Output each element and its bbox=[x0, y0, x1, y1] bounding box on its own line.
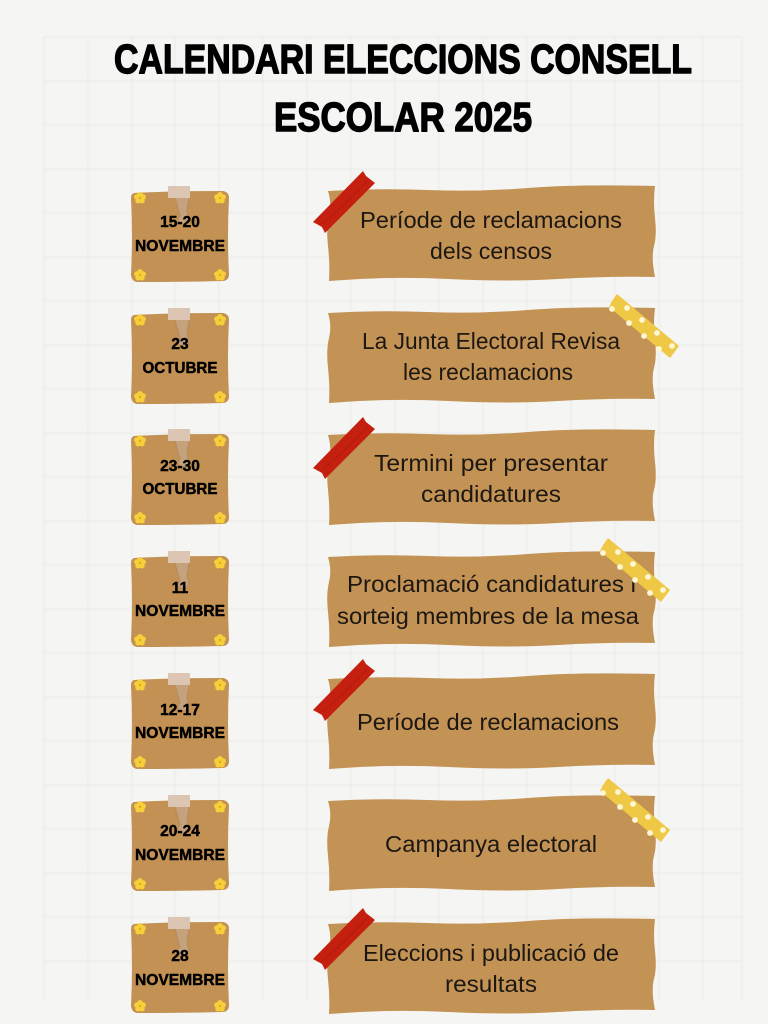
row 2: date label bbox=[142, 336, 218, 377]
row 2: description text: La Junta Electoral Revisa bbox=[362, 328, 621, 354]
title bbox=[114, 36, 692, 140]
row 6: description panel bbox=[327, 795, 656, 891]
row 4: description text bbox=[337, 571, 640, 629]
row 1: date label: NOVEMBRE bbox=[135, 238, 225, 255]
row 6: yellow tape bbox=[600, 778, 670, 842]
row 7: description panel bbox=[327, 918, 656, 1014]
row 3: description text bbox=[374, 450, 608, 507]
row 2: date note bbox=[131, 308, 229, 404]
row 7: date label: NOVEMBRE bbox=[135, 972, 225, 989]
row 7: description text bbox=[363, 940, 619, 997]
row 7: date note bbox=[131, 917, 229, 1013]
row 4: description text: Proclamació candidatures i bbox=[347, 571, 636, 597]
row 7: description text: resultats bbox=[445, 971, 537, 997]
row 6: description text: Campanya electoral bbox=[385, 831, 597, 857]
row 1: description panel bbox=[327, 185, 656, 281]
row 6: date note bbox=[131, 795, 229, 891]
row 1: date label bbox=[135, 214, 225, 255]
row 1: description text: dels censos bbox=[430, 238, 552, 264]
row 2: description panel bbox=[327, 307, 656, 403]
row 1: red tape bbox=[313, 171, 375, 233]
row 4: description text: sorteig membres de la mesa bbox=[337, 603, 640, 629]
row 5: date label: 12-17 bbox=[160, 702, 200, 719]
row 3: description text: candidatures bbox=[421, 481, 561, 507]
row 1: date label: 15-20 bbox=[160, 214, 200, 231]
row 6: date label: 20-24 bbox=[160, 823, 200, 840]
row 7: date label bbox=[135, 948, 225, 989]
row 5: date note bbox=[131, 673, 229, 769]
row 2: description text: les reclamacions bbox=[403, 359, 573, 385]
row 3: date label: OCTUBRE bbox=[142, 481, 218, 498]
row 5: red tape bbox=[313, 659, 375, 721]
row 4: date label: NOVEMBRE bbox=[135, 603, 225, 620]
row 1: date note bbox=[131, 186, 229, 282]
row 5: description panel bbox=[327, 673, 656, 769]
row 4: date note bbox=[131, 551, 229, 647]
row 5: date label bbox=[135, 702, 225, 742]
row 4: date label bbox=[135, 580, 225, 620]
row 2: date label: 23 bbox=[171, 336, 189, 353]
row 4: date label: 11 bbox=[172, 580, 189, 597]
row 3: description text: Termini per presentar bbox=[374, 450, 608, 476]
row 4: description panel bbox=[327, 551, 656, 647]
row 3: description panel bbox=[327, 429, 656, 525]
row 4: yellow tape bbox=[600, 538, 670, 602]
row 3: date label bbox=[142, 458, 218, 498]
row 3: date note bbox=[131, 429, 229, 525]
row 2: yellow tape bbox=[609, 294, 679, 358]
row 3: red tape bbox=[313, 417, 375, 479]
row 2: date label: OCTUBRE bbox=[142, 360, 218, 377]
title: ESCOLAR 2025 bbox=[274, 94, 532, 140]
row 7: description text: Eleccions i publicació de bbox=[363, 940, 619, 966]
row 5: date label: NOVEMBRE bbox=[135, 725, 225, 742]
row 2: description text bbox=[362, 328, 621, 385]
row 1: description text bbox=[360, 207, 622, 264]
row 6: date label: NOVEMBRE bbox=[135, 847, 225, 864]
row 7: date label: 28 bbox=[171, 948, 189, 965]
row 7: red tape bbox=[313, 908, 375, 970]
row 1: description text: Període de reclamacions bbox=[360, 207, 622, 233]
row 6: date label bbox=[135, 823, 225, 864]
row 5: description text: Període de reclamacions bbox=[357, 709, 619, 735]
row 3: date label: 23-30 bbox=[160, 458, 200, 475]
